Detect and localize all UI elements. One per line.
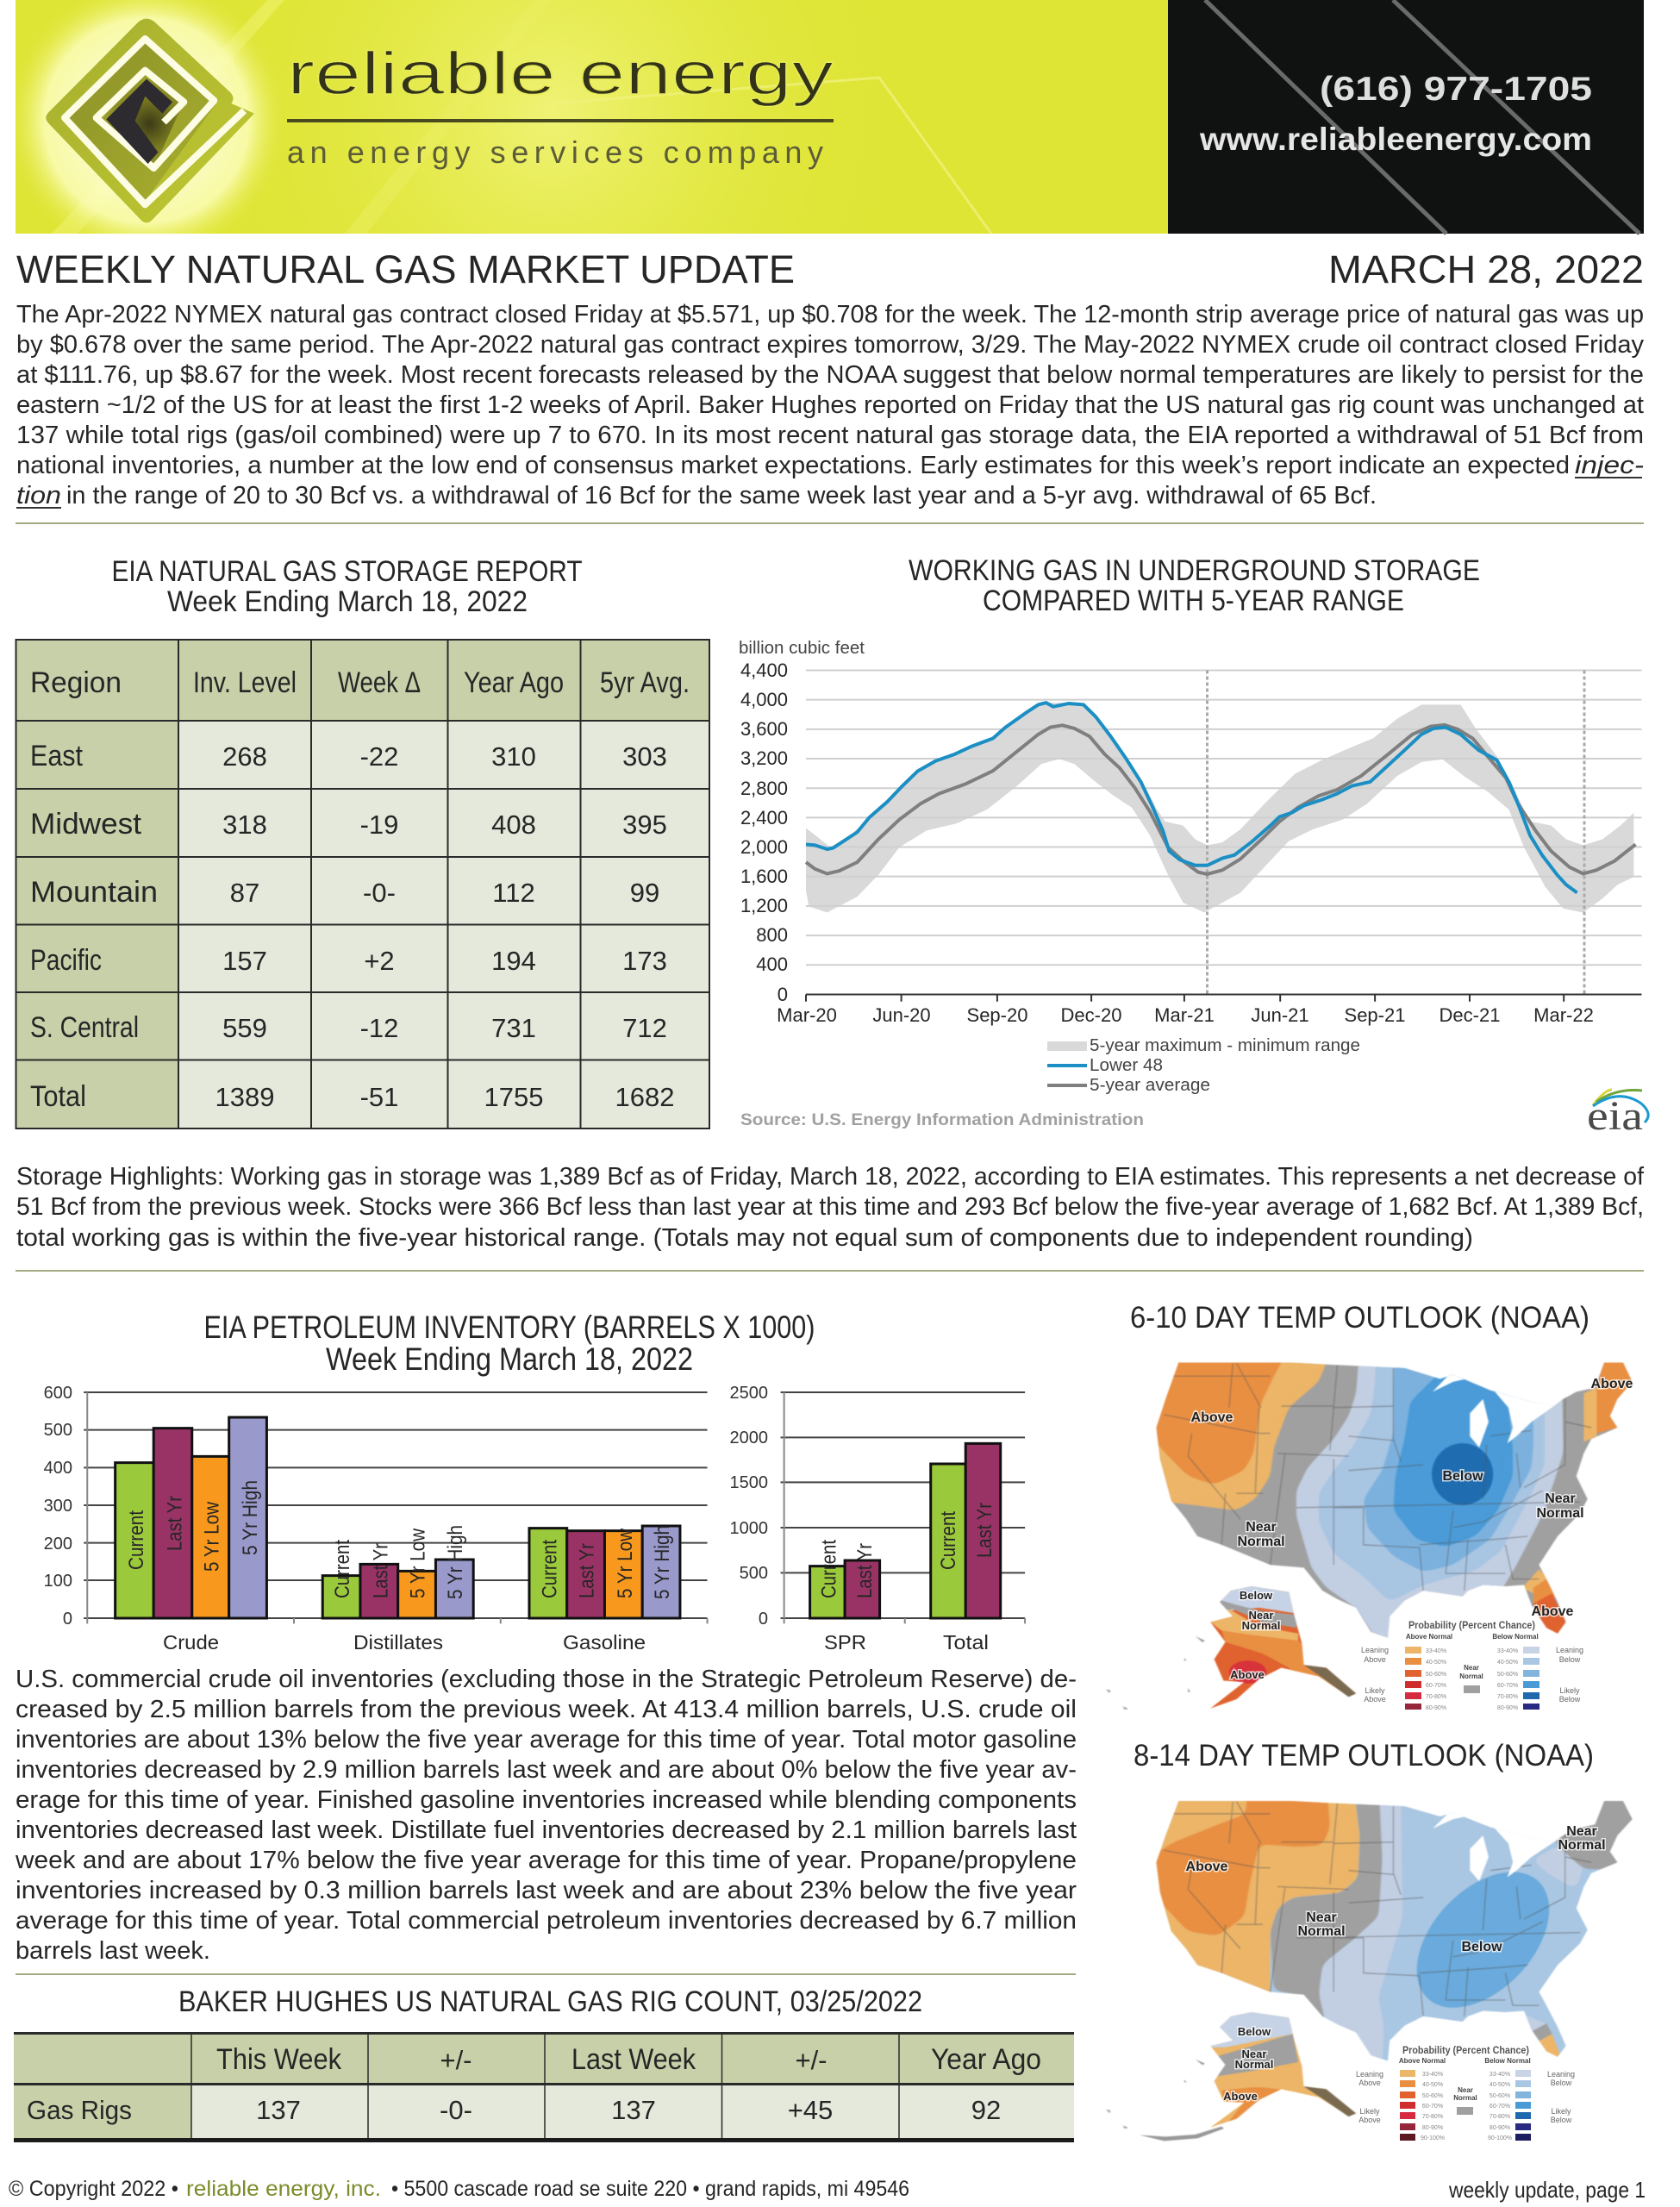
petroleum commentary text: creased by 2.5 million barrels from the previous week. At 413.4 million barrels, U.S. crude oil [16,1696,1077,1723]
petroleum commentary text [15,1666,1077,1965]
bar chart: petroleum inventory: 2000 [729,1429,768,1447]
storage table: Total [30,1080,86,1113]
map legend: 33-40% [1490,2072,1510,2078]
heading: 6-10 day outlook: 6-10 DAY TEMP OUTLOOK (NOAA) [1130,1301,1589,1335]
line chart: working gas in storage: billion cubic feet [739,639,865,658]
storage table: 731 [491,1013,536,1043]
bar chart: petroleum inventory: Current [125,1510,148,1570]
bar chart: petroleum inventory: Current [538,1540,562,1598]
bar chart: petroleum inventory: Last Yr [853,1543,877,1598]
heading: working gas chart: WORKING GAS IN UNDERGROUND STORAGE [909,554,1480,587]
map: 8-14 day outlook: Near [1242,2048,1266,2060]
map: 8-14 day outlook [1106,1777,1655,2141]
line chart: working gas in storage: Mar-22 [1533,1004,1594,1026]
petroleum commentary text: inventories increased by 0.3 million barrels last week and are about 23% below the five year [16,1877,1077,1904]
map: 6-10 day outlook: Above [1532,1604,1574,1619]
bar chart: petroleum inventory: 1000 [729,1519,768,1538]
rig count table: 137 [256,2095,301,2125]
map legend: Likely [1365,1686,1385,1695]
petroleum commentary text: inventories decreased last week. Distillate fuel inventories decreased by 2.1 million barrels last [16,1816,1077,1844]
map legend: 40-50% [1426,1660,1446,1666]
map legend: Near [1464,1664,1479,1672]
storage table: Region [30,666,122,699]
bar chart: petroleum inventory: 5 Yr High [444,1525,467,1599]
footer copyright: reliable energy, inc. [186,2177,381,2201]
storage table: 318 [222,810,267,840]
map legend: 40-50% [1497,1660,1518,1666]
map: 8-14 day outlook: Above [1223,2090,1258,2103]
map legend: Normal [1459,1672,1483,1680]
chart legend: 5-year average [1090,1076,1210,1095]
map legend: 70-80% [1497,1694,1518,1700]
banner [16,0,1644,234]
map legend: Below [1551,2079,1572,2087]
page number: weekly update, page 1 [1448,2177,1646,2203]
storage table: 310 [491,741,536,772]
storage table: 268 [222,741,267,772]
map legend: 80-90% [1490,2125,1510,2131]
storage table: 157 [222,946,267,976]
heading: 8-14 day outlook: 8-14 DAY TEMP OUTLOOK (NOAA) [1134,1739,1594,1772]
storage table: -12 [360,1013,398,1043]
map legend: 50-60% [1426,1672,1446,1678]
storage table [16,640,710,1129]
icon: logo [46,19,254,222]
petroleum commentary text: U.S. commercial crude oil inventories (excluding those in the Strategic Petroleum Reserve) de- [16,1666,1077,1693]
petroleum commentary text: barrels last week. [16,1937,210,1965]
rig count table: +45 [788,2095,833,2125]
map legend: 70-80% [1490,2114,1510,2120]
storage table: S. Central [30,1011,139,1044]
bar chart: petroleum inventory: 1500 [729,1473,768,1492]
icon: eia logo: eia [1587,1093,1643,1139]
bar chart: petroleum inventory: Current [331,1540,354,1598]
heading: rig count: BAKER HUGHES US NATURAL GAS RIG COUNT, 03/25/2022 [178,1985,922,2018]
map legend: Above Normal [1406,1633,1452,1641]
heading: petroleum inventory [203,1310,815,1377]
map: 8-14 day outlook: Normal [1297,1924,1346,1939]
map legend: Below [1559,1655,1581,1664]
footer copyright: • 5500 cascade road se suite 220 • grand rapids, mi 49546 [391,2177,909,2201]
market summary text: national inventories, a number at the low end of consensus market expectations. Early estimates for this week’s report indicate an expected [16,452,1570,479]
map legend: Probability (Percent Chance) [1402,2044,1529,2056]
bar chart: petroleum inventory: Last Yr [973,1503,996,1558]
bar chart: petroleum inventory: 100 [44,1572,72,1591]
map: 8-14 day outlook: Near [1566,1824,1597,1839]
map: 8-14 day outlook: Normal [1558,1838,1606,1853]
line chart: working gas in storage [739,639,1648,1139]
storage table: Inv. Level [193,666,297,699]
map legend: 60-70% [1426,1683,1446,1689]
map legend: Above [1364,1655,1386,1664]
map: 8-14 day outlook: Above [1186,1860,1228,1874]
map legend: Above Normal [1399,2057,1446,2065]
company name: reliable energy [287,40,834,107]
heading: petroleum inventory: EIA PETROLEUM INVENTORY (BARRELS X 1000) [203,1310,815,1345]
map legend: Below Normal [1492,1633,1539,1641]
map: 6-10 day outlook: Above [1191,1410,1233,1425]
chart legend: 5-year maximum - minimum range [1090,1036,1360,1055]
source: Source: U.S. Energy Information Administration [740,1111,1144,1129]
website: www.reliableenergy.com [1199,122,1592,157]
map: 6-10 day outlook: Near [1246,1520,1277,1535]
map: 8-14 day outlook: Normal [1235,2058,1273,2071]
map: 6-10 day outlook: Above [1230,1668,1265,1681]
storage table: 112 [492,878,535,908]
bar chart: petroleum inventory: 300 [44,1497,72,1516]
map: 6-10 day outlook: Normal [1237,1535,1285,1549]
heading: working gas chart [909,554,1480,617]
bar chart: petroleum inventory: Gasoline [563,1631,646,1654]
map legend: 60-70% [1497,1683,1518,1689]
line chart: working gas in storage: 3,200 [740,747,788,769]
map legend: Likely [1359,2107,1380,2116]
market summary text: The Apr-2022 NYMEX natural gas contract closed Friday at $5.571, up $0.708 for the week. The 12-month strip average price of natural gas was up [16,301,1644,328]
map: 6-10 day outlook: Normal [1536,1506,1584,1521]
bar chart: petroleum inventory: 5 Yr Low [614,1528,637,1598]
bar chart: petroleum inventory: SPR [824,1631,866,1654]
title: WEEKLY NATURAL GAS MARKET UPDATE [16,247,795,291]
storage highlights text: 51 Bcf from the previous week. Stocks were 366 Bcf less than last year at this time and 293 Bcf below the five-year average of 1,682 Bcf. At 1,389 Bcf, [16,1193,1644,1221]
storage table: 559 [222,1013,267,1043]
line chart: working gas in storage: Mar-21 [1154,1004,1215,1026]
map: 6-10 day outlook: Above [1591,1377,1633,1391]
rig count table [14,2032,1074,2142]
map legend: 50-60% [1490,2093,1510,2099]
bar chart: petroleum inventory: Distillates [353,1631,443,1654]
market summary text: by $0.678 over the same period. The Apr-2022 natural gas contract expires tomorrow, 3/29. The May-2022 NYMEX crude oil contract closed Friday [16,331,1644,359]
map legend: 40-50% [1490,2082,1510,2088]
map: 6-10 day outlook: Near [1545,1491,1576,1506]
storage table: 712 [622,1013,667,1043]
map legend: Normal [1453,2094,1477,2102]
bar chart: petroleum inventory: 5 Yr High [239,1480,262,1555]
map: 8-14 day outlook: Below [1238,2025,1271,2038]
storage table: 395 [622,810,667,840]
storage table: 1389 [215,1082,274,1112]
chart legend [1047,1036,1360,1095]
bar chart: petroleum inventory: 5 Yr Low [407,1528,429,1598]
map: 6-10 day outlook [1106,1345,1655,1711]
line chart: working gas in storage: 2,000 [740,836,788,858]
petroleum commentary text: inventories decreased by 2.9 million barrels last week and are about 0% below the five year av- [16,1756,1077,1784]
heading: working gas chart: COMPARED WITH 5-YEAR RANGE [983,585,1404,617]
map legend [1361,1619,1583,1711]
map legend: 50-60% [1497,1672,1518,1678]
bar chart: petroleum inventory: Current [817,1540,841,1598]
storage highlights text: total working gas is within the five-year historical range. (Totals may not equal sum of components due to independent rounding) [16,1224,1473,1252]
map legend: Likely [1551,2107,1571,2116]
map legend: Leaning [1556,1646,1583,1654]
storage table: -0- [363,878,396,908]
map legend: Leaning [1356,2070,1383,2079]
map legend: Below Normal [1484,2057,1531,2065]
line chart: working gas in storage: Sep-20 [967,1004,1027,1026]
map: 8-14 day outlook: Near [1306,1910,1337,1925]
line chart: working gas in storage: Jun-21 [1251,1004,1309,1026]
storage table: -22 [360,741,398,772]
storage table: Pacific [30,944,102,977]
line chart: working gas in storage: 4,000 [740,689,788,710]
line chart: working gas in storage: 0 [778,984,788,1005]
bar chart: petroleum inventory: 500 [44,1421,72,1440]
petroleum commentary text: inventories are about 13% below the five year average for this time of year. Total motor gasoline [16,1726,1077,1754]
map legend: Likely [1559,1686,1580,1695]
storage table: East [30,740,83,772]
map: 8-14 day outlook: Below [1461,1940,1502,1954]
map legend: 80-90% [1426,1705,1446,1711]
map legend: Leaning [1361,1646,1389,1654]
map legend: 90-100% [1488,2135,1512,2141]
line chart: working gas in storage: 3,600 [740,718,788,740]
line chart: working gas in storage: 800 [756,924,788,946]
rig count table: -0- [440,2095,472,2125]
map legend: Above [1358,2079,1381,2087]
storage table: -51 [360,1082,398,1112]
rig count table: +/- [440,2045,472,2075]
tagline: an energy services company [287,134,823,170]
bar chart: petroleum inventory: 5 Yr Low [200,1501,224,1572]
bar chart: petroleum inventory: 5 Yr High [651,1525,674,1599]
storage table: 87 [230,878,259,908]
rig count table: 137 [611,2095,656,2125]
map legend: 33-40% [1422,2072,1443,2078]
chart legend: Lower 48 [1090,1056,1163,1075]
bar chart: petroleum inventory: Crude [163,1631,219,1654]
storage table: 1682 [615,1082,674,1112]
map legend: 60-70% [1422,2104,1443,2110]
storage table: 408 [491,810,536,840]
bar chart: petroleum inventory: 500 [740,1564,768,1583]
storage highlights text: Storage Highlights: Working gas in storage was 1,389 Bcf as of Friday, March 18, 2022, according to EIA estimates. This represents a net decrease of [16,1163,1645,1191]
map legend: 80-90% [1422,2125,1443,2131]
rig count table: Gas Rigs [27,2095,132,2125]
storage table: 173 [622,946,667,976]
map legend: Below [1559,1695,1581,1704]
map legend: Above [1358,2116,1381,2124]
bar chart: petroleum inventory: Last Yr [576,1543,598,1598]
map: 6-10 day outlook: Near [1249,1609,1273,1622]
bar chart: petroleum inventory: 600 [44,1384,72,1403]
line chart: working gas in storage: Dec-20 [1061,1004,1121,1026]
map legend: 70-80% [1426,1694,1446,1700]
line chart: working gas in storage: 400 [756,953,788,975]
storage table: 99 [630,878,659,908]
bar chart: petroleum inventory: 400 [44,1459,72,1478]
rig count table: This Week [216,2043,342,2076]
storage table: 1755 [484,1082,543,1112]
map legend: Above [1364,1695,1386,1704]
heading: petroleum inventory: Week Ending March 18, 2022 [326,1341,693,1377]
rig count table: Year Ago [931,2043,1041,2076]
bar chart: petroleum inventory [44,1384,1025,1654]
bar chart: petroleum inventory: 2500 [729,1384,768,1403]
line chart: working gas in storage: Mar-20 [777,1004,837,1026]
line chart: working gas in storage: Sep-21 [1345,1004,1405,1026]
heading: storage report: EIA NATURAL GAS STORAGE REPORT [112,555,583,588]
petroleum commentary text: erage for this time of year. Finished gasoline inventories increased while blending components [16,1786,1077,1814]
map legend: Probability (Percent Chance) [1408,1619,1535,1631]
map legend: Below [1551,2116,1572,2124]
map: 6-10 day outlook: Below [1240,1589,1273,1602]
rig count table: +/- [795,2045,828,2075]
petroleum commentary text: average for this time of year. Total commercial petroleum inventories decreased by 6.7 million [16,1907,1077,1935]
storage table: Week Δ [338,666,421,699]
bar chart: petroleum inventory: 0 [63,1610,72,1629]
bar chart: petroleum inventory: Last Yr [369,1543,393,1598]
line chart: working gas in storage: Jun-20 [872,1004,931,1026]
map legend: 33-40% [1497,1648,1518,1654]
map legend: Near [1458,2086,1473,2094]
market summary text: eastern ~1/2 of the US for at least the first 1-2 weeks of April. Baker Hughes reported on Friday that the US natural gas rig count was unchanged at [16,391,1644,419]
bar chart: petroleum inventory: Last Yr [164,1496,186,1551]
storage table: -19 [360,810,398,840]
petroleum commentary text: week and are about 17% below the five year average for this time of year. Propane/propylene [15,1847,1077,1874]
line chart: working gas in storage: 1,600 [740,866,788,887]
line chart: working gas in storage: 2,400 [740,807,788,828]
storage highlights text [16,1163,1645,1252]
storage table: Mountain [30,876,158,909]
bar chart: petroleum inventory: Total [943,1631,989,1654]
line chart: working gas in storage: 4,400 [740,660,788,681]
storage table: 5yr Avg. [600,666,690,699]
map legend: 50-60% [1422,2093,1443,2099]
storage table: +2 [364,946,395,976]
storage table: Year Ago [464,666,564,699]
date: MARCH 28, 2022 [1328,247,1644,291]
map legend: 70-80% [1422,2114,1443,2120]
map: 6-10 day outlook: Below [1442,1469,1483,1484]
market summary text: at $111.76, up $8.67 for the week. Most recent forecasts released by the NOAA suggest that below normal temperatures are likely to persist for the [16,361,1644,389]
bar chart: petroleum inventory: Current [937,1511,960,1570]
map legend: 40-50% [1422,2082,1443,2088]
bar chart: petroleum inventory: 200 [44,1535,72,1554]
rig count table: Last Week [571,2043,696,2076]
map legend [1356,2044,1575,2141]
map legend: 60-70% [1490,2104,1510,2110]
market summary text: tion [16,482,61,510]
map legend: 80-90% [1497,1705,1518,1711]
storage table: 194 [491,946,536,976]
black contact panel [1168,0,1644,234]
bar chart: petroleum inventory: 0 [759,1610,768,1629]
storage table: 303 [622,741,667,772]
market summary text [16,301,1644,510]
heading: storage report [112,555,583,618]
line chart: working gas in storage: 2,800 [740,778,788,799]
market summary text: in the range of 20 to 30 Bcf vs. a withdrawal of 16 Bcf for the same week last year and a 5-yr avg. withdrawal of 65 Bcf. [66,482,1377,510]
line chart: working gas in storage: 1,200 [740,895,788,916]
storage table: Midwest [30,808,142,841]
market summary text: injec- [1575,452,1644,479]
map legend: 33-40% [1426,1648,1446,1654]
phone number: (616) 977-1705 [1320,71,1592,108]
footer copyright: © Copyright 2022 • [9,2177,178,2201]
rig count table: 92 [971,2095,1001,2125]
heading: storage report: Week Ending March 18, 2022 [167,585,528,618]
market summary text: 137 while total rigs (gas/oil combined) were up 7 to 670. In its most recent natural gas storage data, the EIA reported a withdrawal of 51 Bcf from [16,422,1644,449]
map: 6-10 day outlook: Normal [1242,1619,1280,1632]
line chart: working gas in storage: Dec-21 [1440,1004,1500,1026]
map legend: 90-100% [1421,2135,1445,2141]
map legend: Leaning [1547,2070,1575,2079]
footer copyright [9,2177,909,2201]
